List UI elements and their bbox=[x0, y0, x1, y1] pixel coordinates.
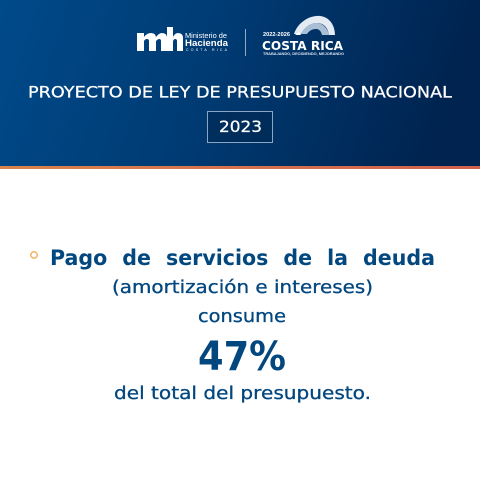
logo: Ministerio de Hacienda: Ministerio de bbox=[185, 31, 227, 40]
heading: Pago de servicios de la deuda bbox=[50, 246, 435, 270]
subheading: (amortización e intereses) bbox=[112, 278, 373, 298]
logo: Costa Rica 2022-2026 bbox=[262, 16, 344, 56]
logo: Ministerio de Hacienda: Hacienda bbox=[185, 38, 229, 48]
percentage: 47% bbox=[198, 334, 286, 380]
consume: consume bbox=[198, 307, 286, 327]
logo: Ministerio de Hacienda: COSTA RICA bbox=[186, 48, 228, 52]
logo: Ministerio de Hacienda bbox=[137, 27, 229, 52]
logo: Costa Rica 2022-2026: COSTA RICA bbox=[262, 38, 343, 53]
title: PROYECTO DE LEY DE PRESUPUESTO NACIONAL bbox=[28, 82, 452, 102]
icon: arch bbox=[294, 16, 335, 35]
year box bbox=[208, 112, 272, 142]
year box: 2023 bbox=[219, 117, 262, 136]
main text block bbox=[50, 246, 435, 404]
bullet bbox=[31, 252, 37, 258]
logo: Costa Rica 2022-2026: TRABAJANDO, DECIDIENDO, MEJORANDO bbox=[263, 52, 344, 56]
logo: Costa Rica 2022-2026: 2022-2026 bbox=[263, 32, 290, 38]
header band bbox=[0, 0, 480, 169]
closing line: del total del presupuesto. bbox=[114, 384, 371, 404]
logo divider bbox=[245, 29, 246, 56]
